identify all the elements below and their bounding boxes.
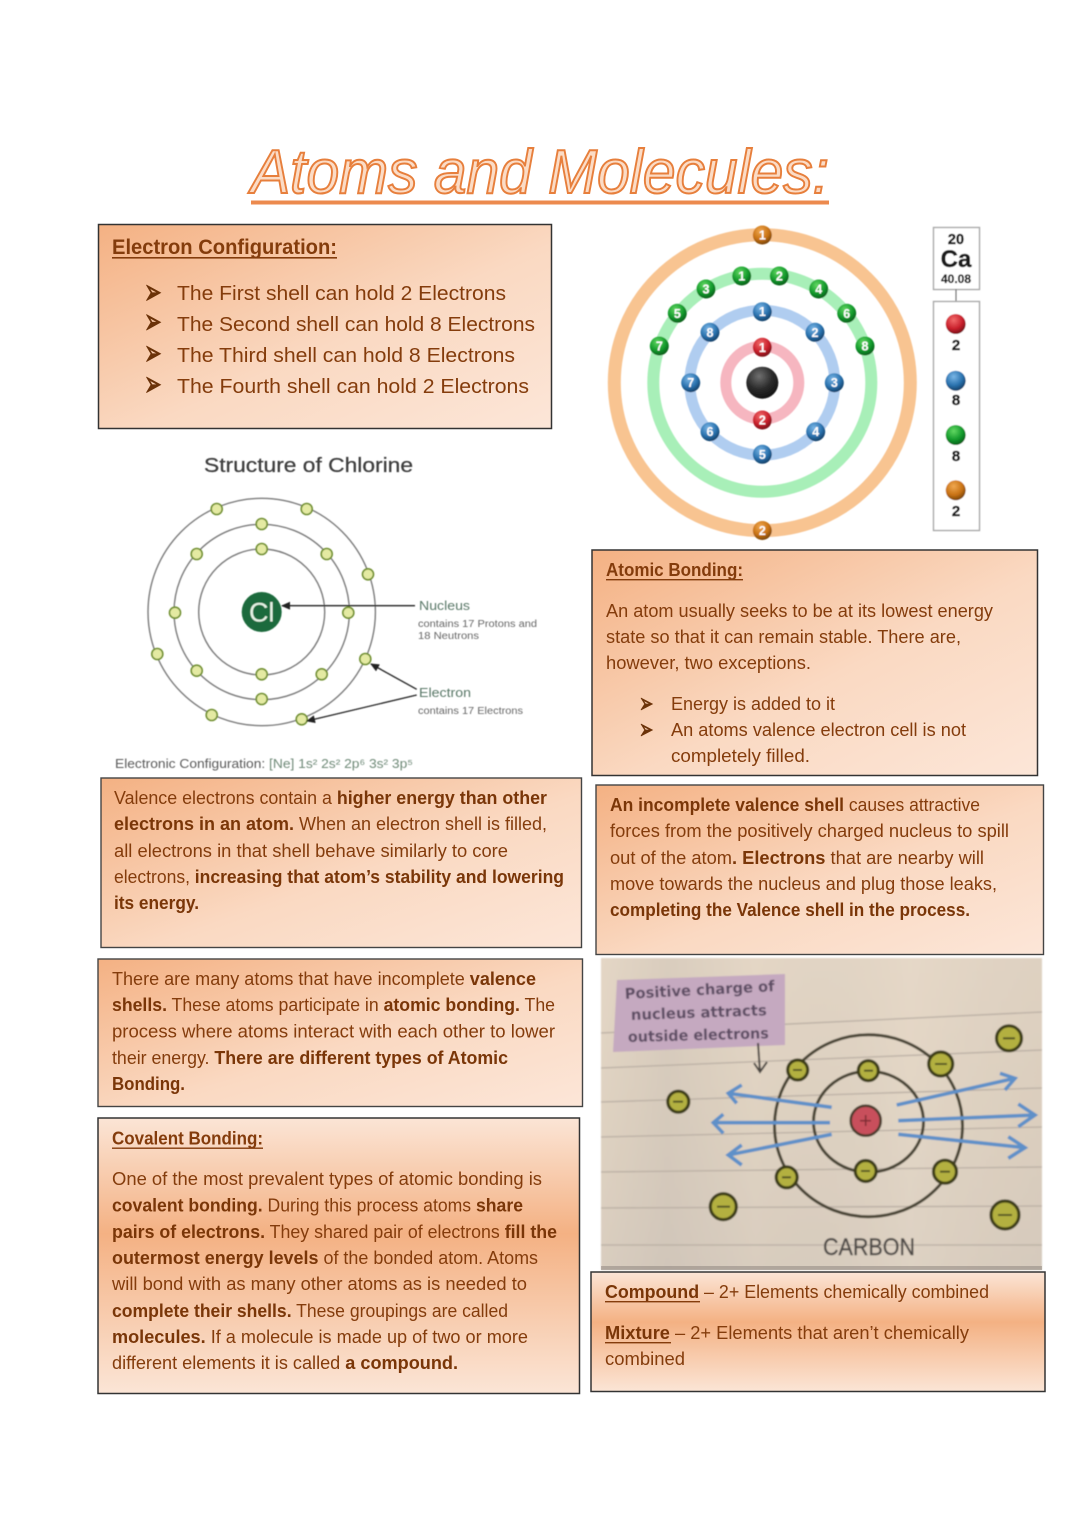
atomic bonding paragraph: however, two exceptions. (606, 653, 811, 673)
covalent bonding paragraph: different elements it is called a compound. (112, 1353, 458, 1373)
panel: incomplete shells and atomic bonding: There are many atoms that have incomplete valence (112, 969, 536, 989)
atomic bonding exceptions list: ➢ (639, 688, 653, 720)
panel: incomplete valence shell: out of the atom. Electrons that are nearby will (610, 848, 984, 868)
legend: calcium element card: 40.08 (941, 272, 971, 286)
list: shell capacities (144, 271, 535, 405)
diagram: calcium electron shells: 2 (759, 524, 766, 538)
legend: calcium element card: 8 (952, 448, 960, 465)
attraction arrows (713, 1073, 1035, 1165)
heading: electron configuration: Electron Configuration: (112, 235, 337, 259)
atomic bonding paragraph (606, 601, 993, 673)
arrow: electron pointer upper (371, 664, 417, 689)
panel: incomplete shells and atomic bonding (98, 959, 582, 1106)
mixture definition (605, 1323, 969, 1369)
covalent bonding paragraph: covalent bonding. During this process atoms share (112, 1196, 523, 1216)
diagram: calcium electron shells: 1 (759, 228, 766, 242)
panel: incomplete shells and atomic bonding: their energy. There are different types of Atomic (112, 1048, 508, 1068)
carbon electrons (668, 1026, 1022, 1229)
panel: valence electrons (101, 778, 582, 948)
arrow: callout pointer (754, 1043, 767, 1072)
list: shell capacities: ➢ (144, 271, 162, 313)
legend: calcium element card (934, 228, 980, 530)
diagram: calcium electron shells: 7 (687, 376, 694, 390)
nucleus label: contains 17 Protons and (418, 619, 537, 630)
covalent bonding paragraph (111, 1169, 557, 1373)
electron label: Electron (419, 686, 471, 700)
panel: valence electrons: electrons in an atom. When an electron shell is filled, (114, 814, 547, 834)
mixture definition: Mixture – 2+ Elements that aren’t chemically (605, 1323, 969, 1343)
note: positive charge callout (613, 974, 785, 1052)
nucleus label: Nucleus (419, 599, 470, 613)
heading: covalent bonding: Covalent Bonding: (112, 1128, 263, 1148)
nucleus label: 18 Neutrons (418, 631, 479, 642)
diagram: calcium electron shells: 1 (759, 341, 766, 355)
diagram: calcium electron shells: 4 (815, 282, 822, 296)
electronic configuration caption: Electronic Configuration: [Ne] 1s² 2s² 2p⁶ 3s² 3p⁵ (115, 756, 413, 771)
list: shell capacities: ➢ (144, 363, 162, 405)
atomic bonding exceptions list: completely filled. (671, 746, 810, 766)
panel: atomic bonding (592, 550, 1038, 776)
diagram: calcium electron shells: 3 (831, 376, 838, 390)
covalent bonding paragraph: complete their shells. These groupings are called (112, 1301, 508, 1321)
diagram: calcium electron shells: 6 (843, 307, 850, 321)
note: positive charge callout: nucleus attracts (631, 1001, 767, 1024)
legend: calcium element card: 8 (952, 392, 960, 409)
list: shell capacities: ➢ (144, 332, 162, 374)
diagram: calcium electron shells (614, 226, 910, 540)
diagram: calcium electron shells: 5 (759, 448, 766, 462)
diagram: calcium electron shells: 4 (812, 425, 819, 439)
panel: incomplete valence shell: move towards the nucleus and plug those leaks, (610, 874, 997, 894)
chlorine heading: Structure of Chlorine (204, 455, 413, 477)
panel: valence electrons: Valence electrons contain a higher energy than other (114, 788, 547, 808)
covalent bonding paragraph: One of the most prevalent types of atomic bonding is (112, 1169, 542, 1189)
electron label: contains 17 Electrons (418, 706, 523, 717)
list: shell capacities: The Fourth shell can hold 2 Electrons (177, 375, 529, 398)
panel: electron configuration (98, 224, 552, 428)
covalent bonding paragraph: pairs of electrons. They shared pair of electrons fill the (112, 1222, 557, 1242)
list: shell capacities: The First shell can hold 2 Electrons (177, 282, 506, 305)
diagram: calcium electron shells: 2 (759, 414, 766, 428)
diagram: calcium electron shells: 2 (776, 270, 783, 284)
panel: incomplete valence shell: forces from the positively charged nucleus to spill (610, 821, 1009, 841)
atomic bonding paragraph: An atom usually seeks to be at its lowest energy (606, 601, 993, 621)
diagram: calcium electron shells: 8 (862, 340, 869, 354)
mixture definition: combined (605, 1349, 685, 1369)
list: shell capacities: The Third shell can hold 8 Electrons (177, 344, 515, 367)
list: shell capacities: ➢ (144, 301, 162, 342)
atomic bonding exceptions list: Energy is added to it (671, 694, 835, 714)
panel: valence electrons: its energy. (114, 893, 199, 913)
panel: incomplete valence shell: An incomplete valence shell causes attractive (610, 795, 980, 815)
chlorine nucleus (242, 592, 282, 632)
atomic bonding exceptions list: ➢ (639, 714, 653, 746)
atomic bonding paragraph: state so that it can remain stable. There are, (606, 627, 961, 647)
legend: calcium element card: Ca (941, 246, 972, 273)
covalent bonding paragraph: will bond with as many other atoms as is needed to (111, 1274, 527, 1294)
covalent bonding paragraph: outermost energy levels of the bonded atom. Atoms (112, 1248, 538, 1268)
diagram: calcium electron shells: 2 (812, 326, 819, 340)
panel: valence electrons: electrons, increasing that atom’s stability and lowering (114, 867, 564, 887)
diagram: calcium electron shells: 6 (707, 425, 714, 439)
photo: carbon atom notebook sketch (601, 958, 1042, 1270)
carbon caption: CARBON (823, 1234, 915, 1261)
legend: calcium element card: 20 (948, 232, 964, 248)
legend: calcium element card: 2 (952, 337, 960, 354)
covalent bonding paragraph: molecules. If a molecule is made up of two or more (112, 1327, 528, 1347)
diagram: structure of chlorine (115, 455, 537, 771)
carbon shells (774, 1035, 962, 1217)
diagram: calcium electron shells: 3 (703, 282, 710, 296)
heading: atomic bonding: Atomic Bonding: (606, 560, 743, 580)
arrow: electron pointer lower (307, 695, 417, 721)
diagram: calcium electron shells: 7 (656, 340, 663, 354)
legend: calcium element card: 2 (952, 503, 960, 520)
diagram: calcium electron shells: 1 (759, 305, 766, 319)
atomic bonding exceptions list: An atoms valence electron cell is not (671, 720, 966, 740)
compound definition: Compound – 2+ Elements chemically combined (605, 1282, 989, 1302)
carbon nucleus (851, 1106, 881, 1136)
list: shell capacities: The Second shell can hold 8 Electrons (177, 313, 535, 336)
note: positive charge callout: Positive charge of (624, 977, 775, 1003)
diagram: calcium electron shells: 1 (738, 270, 745, 284)
title: Atoms and Molecules: (247, 138, 829, 207)
atomic bonding exceptions list (639, 688, 966, 766)
panel: covalent bonding (98, 1118, 580, 1394)
diagram: calcium electron shells: 5 (674, 307, 681, 321)
panel: incomplete valence shell: completing the Valence shell in the process. (610, 900, 970, 920)
diagram: calcium electron shells: 8 (707, 326, 714, 340)
chlorine shells and electrons (148, 498, 375, 726)
arrow: nucleus pointer (282, 605, 415, 607)
chlorine nucleus: Cl (249, 598, 274, 628)
panel: incomplete shells and atomic bonding: process where atoms interact with each other to lower (112, 1022, 555, 1042)
panel: compound and mixture (591, 1272, 1045, 1392)
nucleus label (418, 599, 537, 642)
panel: incomplete valence shell (596, 785, 1044, 954)
electron label (418, 686, 523, 717)
panel: valence electrons: all electrons in that shell behave similarly to core (114, 841, 508, 861)
note: positive charge callout: outside electrons (628, 1024, 769, 1046)
panel: incomplete shells and atomic bonding: Bonding. (112, 1074, 185, 1094)
panel: incomplete shells and atomic bonding: shells. These atoms participate in atomic bonding. The (112, 995, 555, 1015)
